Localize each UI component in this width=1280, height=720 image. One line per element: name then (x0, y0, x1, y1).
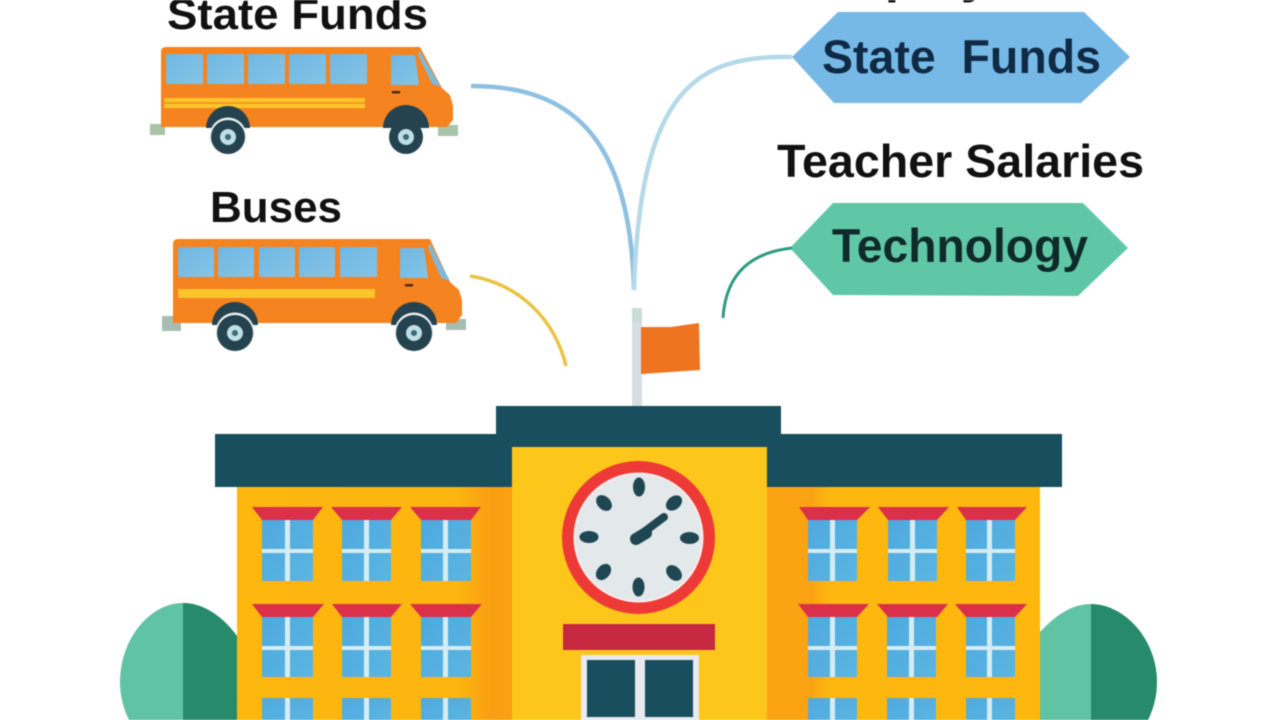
bus: lower (162, 239, 466, 352)
callout: Technology: Technology (832, 219, 1088, 272)
right wing windows (798, 507, 1027, 720)
label: Teacher Salaries: Teacher Salaries (777, 135, 1144, 187)
windshield (428, 243, 450, 281)
rear wheel (206, 106, 250, 154)
school building (215, 406, 1062, 720)
clock (562, 461, 715, 614)
side stripe (178, 289, 375, 298)
tree: right (1040, 604, 1157, 720)
label: Buses: Buses (210, 183, 342, 232)
passenger windows (166, 54, 367, 84)
bus body (173, 239, 462, 323)
arrow: lower bus to school (470, 276, 566, 366)
flag (632, 308, 700, 406)
left wing windows (252, 507, 482, 720)
callout: Technology (790, 203, 1128, 296)
windshield (418, 50, 441, 87)
flag cloth (641, 323, 700, 374)
center block (512, 447, 767, 720)
front wheel (391, 302, 437, 352)
side stripe (164, 98, 365, 108)
bus: upper (150, 47, 458, 154)
left wing (237, 487, 512, 720)
door window (400, 248, 428, 278)
bumpers (150, 124, 458, 136)
clock hands (636, 517, 664, 539)
door handle (392, 91, 400, 94)
clock ticks (580, 478, 699, 596)
tree: left (120, 603, 237, 720)
front wheel (383, 105, 429, 154)
entrance sign band (563, 624, 715, 650)
right wing (767, 487, 1040, 720)
callout: State Funds: State Funds (822, 30, 1101, 83)
arrow: upper bus to school (471, 86, 634, 290)
passenger windows (178, 247, 377, 277)
door handle (405, 284, 413, 286)
arrow: Technology to school (723, 248, 792, 318)
callout: State Funds (792, 12, 1130, 103)
rear wheel (212, 302, 258, 352)
bumpers (162, 316, 466, 331)
door window (391, 55, 419, 85)
arrow: State Funds to school (634, 57, 792, 290)
bus body (161, 47, 453, 127)
flag pole (632, 308, 642, 406)
roof (215, 406, 1062, 487)
entrance door (581, 655, 699, 720)
